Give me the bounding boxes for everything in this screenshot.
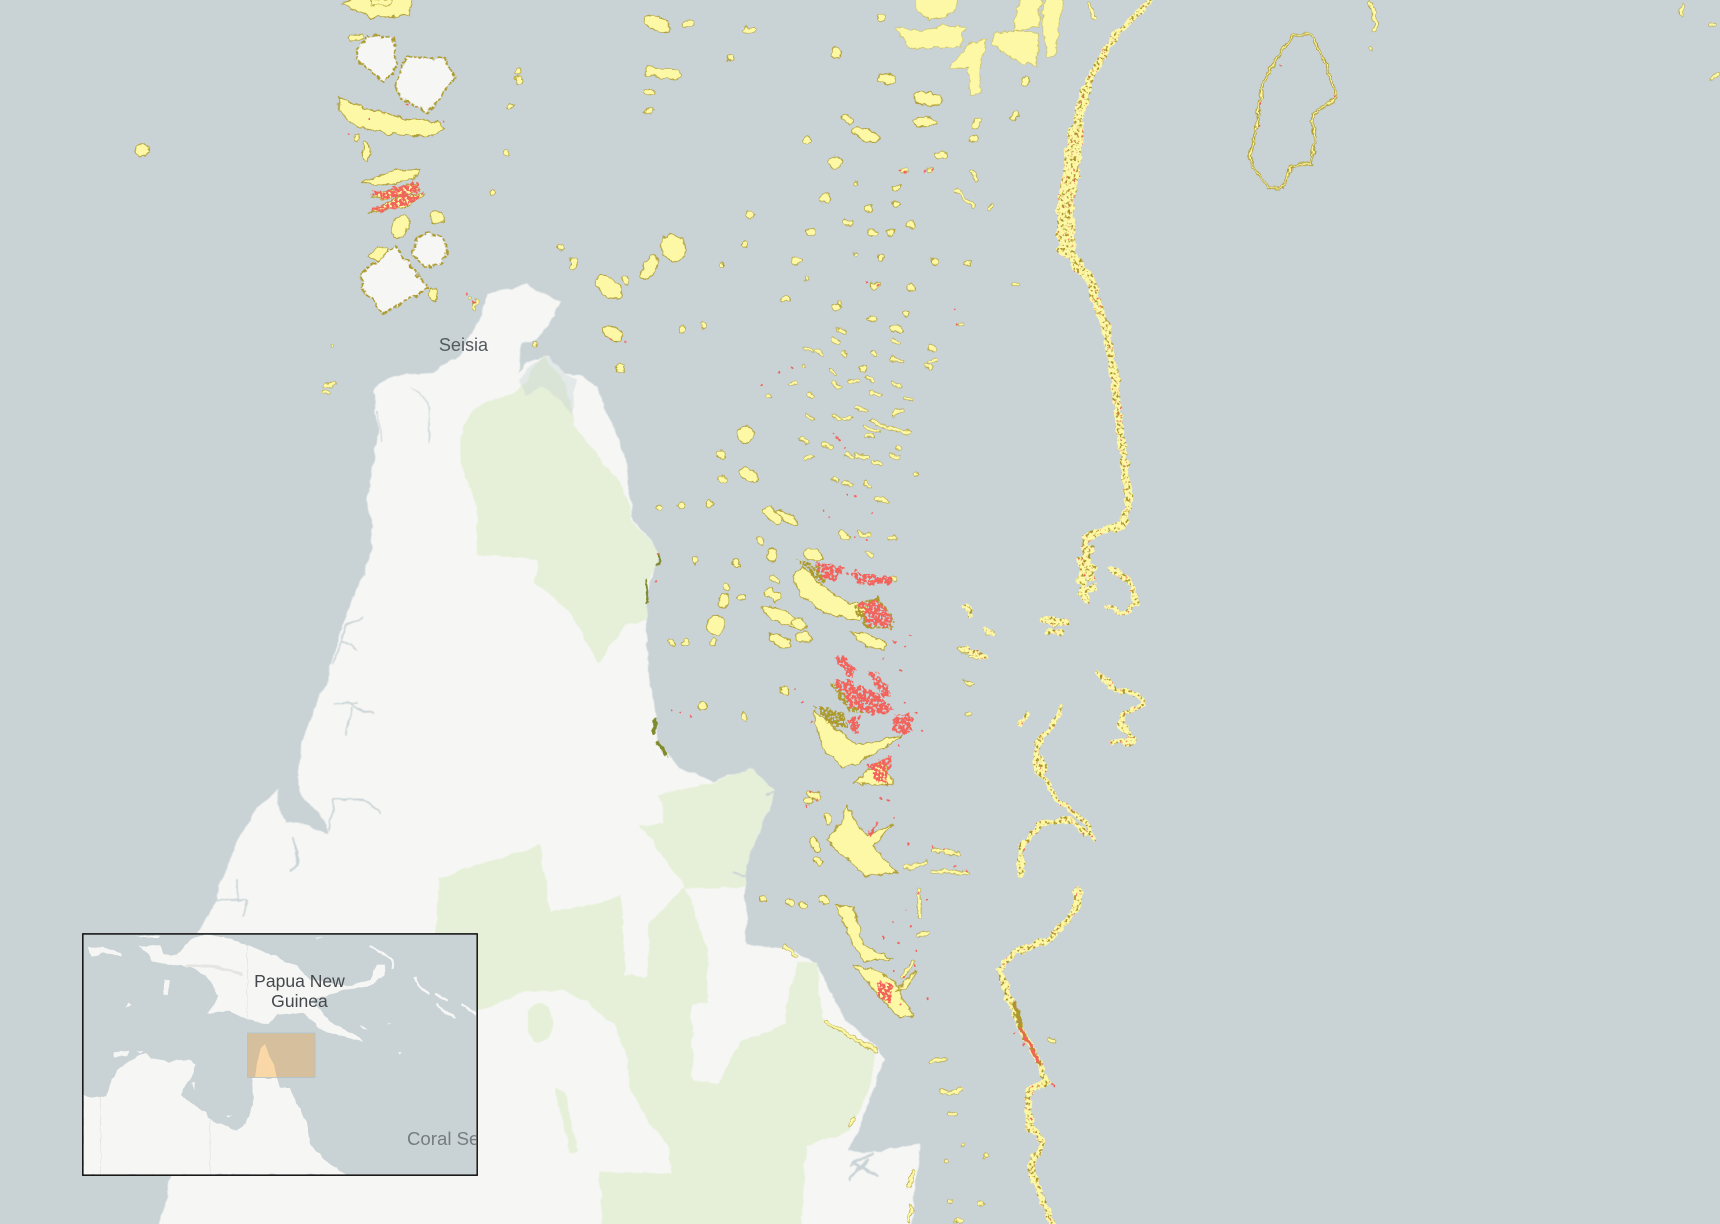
red cluster at arc reef <box>858 599 892 628</box>
northern Torres Strait islands <box>357 35 455 314</box>
land and protected areas <box>154 285 919 1224</box>
island: round islet <box>414 234 446 267</box>
coral reefs: oval reefs <box>136 12 943 853</box>
outer barrier reef with mottled damage <box>965 0 1163 1224</box>
inset study-area rectangle <box>247 1033 315 1078</box>
outer barrier: olive south section <box>1015 1004 1021 1029</box>
land: Cape York Peninsula <box>154 285 919 1224</box>
reef: lobed reef <box>826 806 896 876</box>
inset land: Australia <box>83 1053 347 1175</box>
protected area: small green patches <box>527 1004 578 1154</box>
inset peninsula highlight <box>255 1044 277 1077</box>
reef: banded strait reefs <box>362 170 419 186</box>
inset label: Papua New Guinea: Papua New <box>254 971 345 991</box>
inset frame <box>83 934 477 1175</box>
scattered red dots <box>349 66 1336 1119</box>
red patch east <box>891 713 913 735</box>
red bands strait <box>369 182 426 213</box>
red patch south <box>878 982 894 1004</box>
outer barrier: red south section <box>1021 1029 1040 1064</box>
inset label: Coral Sea: Coral Sea <box>407 1128 490 1149</box>
island: Thursday group <box>395 58 455 113</box>
reef: arc reef <box>793 566 867 621</box>
inset land: New Guinea <box>138 935 385 1041</box>
protected area: central Cape York <box>435 768 878 1224</box>
red patch lobed <box>867 823 878 839</box>
reef: small curved <box>894 971 916 993</box>
protected area: Jardine River <box>461 356 658 664</box>
mangrove inlet shading <box>520 356 576 417</box>
reef: north-east block four <box>1042 0 1064 57</box>
reef: under arc <box>850 631 886 649</box>
reef: north-east block six <box>1015 0 1042 31</box>
reef: large central reef <box>813 710 903 767</box>
reef: north-east block five <box>948 39 986 95</box>
red band two <box>867 671 892 698</box>
inset land: surrounding islands <box>88 935 402 1118</box>
reef: small wedge <box>853 759 894 785</box>
olive under-speckle <box>795 559 893 729</box>
inset borders and highlands <box>101 945 247 1175</box>
inset highland shading <box>187 965 242 974</box>
reef: southern wedge <box>853 965 913 1018</box>
reef: large north-west reef <box>338 97 444 137</box>
red patch arc top <box>817 562 891 586</box>
coral reefs: large reef polygons <box>338 0 1064 1018</box>
red patch <box>847 715 861 733</box>
red band <box>834 679 894 715</box>
reef: top left <box>342 0 415 18</box>
coast fringing reefs, dark olive <box>645 554 666 755</box>
red patch wedge <box>867 757 891 784</box>
rivers and estuaries <box>216 386 878 1179</box>
red cluster at north reef <box>834 655 857 678</box>
reef: strait under-bands <box>369 183 426 213</box>
island: Prince of Wales <box>362 246 428 314</box>
island: Horn group <box>357 35 397 82</box>
inset label: Papua New Guinea: Guinea <box>271 991 328 1011</box>
reef: long diagonal reef <box>836 905 893 961</box>
place label: Seisia: Seisia <box>439 335 489 355</box>
atoll ring <box>1249 35 1337 188</box>
reef: north-east block one <box>895 25 964 48</box>
reef: north-east block two <box>915 0 962 20</box>
outer barrier: northern ribbon <box>965 0 1163 1224</box>
inset locator map <box>82 933 490 1175</box>
inset land: Pacific island chains <box>372 946 477 1018</box>
damaged reef: red bleaching clusters <box>369 182 913 1004</box>
reef: north-east block three <box>993 31 1039 66</box>
